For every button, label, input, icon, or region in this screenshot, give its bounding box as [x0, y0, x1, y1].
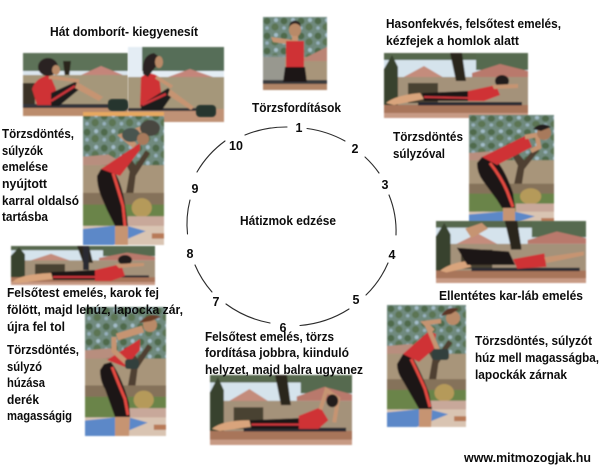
label: lateral raise: karral oldalsó	[2, 194, 79, 208]
label: bend with dumbbell	[393, 130, 463, 161]
step numbers: 3	[382, 178, 389, 192]
photo: back straightened, seated	[128, 47, 224, 122]
photo: trunk rotation	[263, 17, 327, 90]
label: row to waist: súlyzó	[7, 360, 42, 374]
label: trunk rotation lift: fordítása jobbra, kiinduló	[205, 346, 349, 360]
label: row to waist: magasságig	[7, 409, 72, 423]
photo: upper body lift with trunk rotation	[210, 375, 352, 445]
label: back rounding: Hát domborít- kiegyenesít	[50, 25, 199, 39]
photo: forward bend, lateral dumbbell raise	[83, 112, 164, 245]
label: arms overhead: újra fel tol	[7, 320, 65, 334]
step numbers: 8	[187, 247, 194, 261]
arcs between numbered steps	[187, 127, 396, 326]
step numbers: 1	[296, 121, 303, 135]
step numbers: 6	[280, 321, 287, 335]
label: bend with dumbbell: Törzsdöntés	[393, 130, 463, 144]
photo: prone upper body lift, hands under forehead	[384, 53, 528, 118]
label: trunk rotation lift	[205, 330, 363, 377]
label: prone lift: kézfejek a homlok alatt	[386, 34, 520, 48]
label: lateral raise: nyújtott	[2, 177, 48, 191]
step numbers	[187, 121, 396, 335]
step numbers: 5	[353, 293, 360, 307]
label: arms overhead	[7, 286, 183, 334]
label: row to chest: Törzsdöntés, súlyzót	[475, 334, 593, 348]
step numbers: 9	[192, 182, 199, 196]
label: row to chest: lapockák zárnak	[475, 368, 567, 382]
label: lateral raise: súlyzók	[2, 144, 43, 158]
label: trunk rotations: Törzsfordítások	[252, 101, 341, 115]
heading: centre title: Hátizmok edzése	[240, 214, 336, 228]
icon: dumbbells left	[108, 99, 216, 117]
label: row to waist: húzása	[7, 376, 46, 390]
chart: exercise circle	[187, 121, 396, 335]
photo: prone arms overhead	[11, 246, 155, 285]
label: row to waist	[7, 343, 79, 423]
label: bend with dumbbell: súlyzóval	[393, 147, 445, 161]
photo: forward bend with dumbbell, right	[469, 115, 554, 228]
label: arms overhead: Felsőtest emelés, karok fej	[7, 286, 159, 300]
label: lateral raise	[2, 127, 79, 224]
label: row to chest	[475, 334, 599, 382]
step numbers: 2	[352, 142, 359, 156]
label: lateral raise: emelése	[2, 160, 48, 174]
photo: opposite arm and leg raise	[436, 221, 586, 283]
photo: back rounding, seated	[23, 53, 128, 116]
step numbers: 4	[389, 248, 396, 262]
label: prone lift	[386, 17, 561, 48]
label: opposite arm-leg raise: Ellentétes kar-láb emelés	[439, 289, 583, 303]
label: trunk rotation lift: helyzet, majd balra ugyanez	[205, 363, 363, 377]
website address: www.mitmozogjak.hu	[463, 451, 591, 465]
label: lateral raise: tartásba	[2, 210, 49, 224]
photo: forward bend, row to waist	[85, 307, 166, 436]
label: row to waist: derék	[7, 393, 39, 407]
step numbers: 7	[213, 295, 220, 309]
step numbers: 10	[229, 139, 243, 153]
label: lateral raise: Törzsdöntés,	[2, 127, 74, 141]
photo: forward bend, row to chest	[387, 305, 466, 427]
label: arms overhead: fölött, majd lehúz, lapocka zár,	[7, 303, 183, 317]
label: row to waist: Törzsdöntés,	[7, 343, 79, 357]
label: prone lift: Hasonfekvés, felsőtest emelés,	[386, 17, 561, 31]
label: trunk rotation lift: Felsőtest emelés, törzs	[205, 330, 334, 344]
